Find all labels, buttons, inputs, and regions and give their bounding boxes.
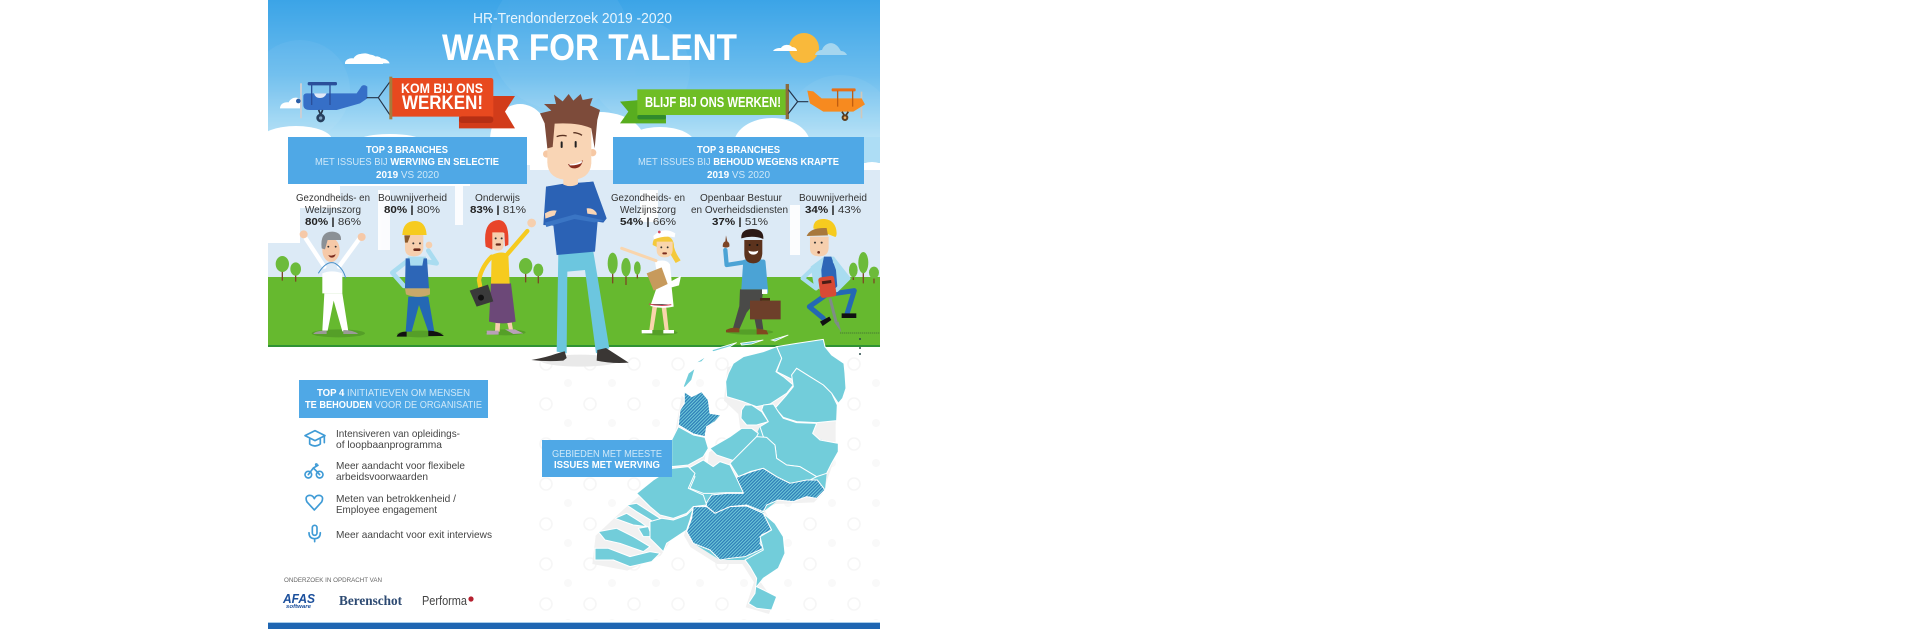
province: Friesland (726, 347, 793, 407)
text block: openbaar bestuur: en Overheidsdiensten (691, 204, 788, 216)
text block: bouwnijverheid right (799, 192, 867, 216)
province: Groningen (777, 339, 846, 403)
text block: gezondheids- en welzijnszorg right: 54% | 66% (620, 216, 676, 228)
panel: top 3 werving en selectie: 2019 VS 2020 (376, 169, 439, 181)
callout: gebieden met meeste issues met werving: ISSUES MET WERVING (554, 459, 660, 471)
icon: orange plane with green banner (620, 84, 865, 123)
banner text: kom bij ons werken (401, 81, 483, 114)
list item: exit interviews: Meer aandacht voor exit interviews (336, 529, 492, 541)
list item: opleidingen: of loopbaanprogramma (336, 439, 442, 451)
text block: onderzoek in opdracht van: ONDERZOEK IN OPDRACHT VAN (284, 577, 382, 584)
islands: Zeeland (595, 503, 660, 567)
province: Utrecht (688, 460, 743, 493)
figure: businessman (723, 229, 781, 335)
callout: gebieden met meeste issues met werving (542, 440, 672, 477)
map shadow (592, 343, 842, 614)
list item: flexibele arbeidsvoorwaarden (336, 460, 465, 483)
land underlay (637, 427, 838, 560)
icon: heart (306, 495, 323, 510)
icon: small cloud top left (345, 53, 383, 64)
province: Drenthe (775, 368, 837, 423)
province: Limburg (745, 513, 785, 610)
panel: top 4 initiatieven: TE BEHOUDEN VOOR DE ORGANISATIE (305, 399, 482, 411)
text block: onderwijs: Onderwijs (475, 192, 520, 204)
text block: onderwijs (470, 192, 526, 216)
figure: main character with crossed arms (531, 94, 629, 367)
figure: worker with jackhammer (803, 219, 880, 333)
panel: sky scene (250, 0, 895, 347)
logo: AFAS software: AFAS (282, 591, 315, 606)
heading: TOP 3 BRANCHES (366, 144, 448, 156)
province: Noord-Holland north hatched (678, 392, 721, 437)
text block: gezondheids- en welzijnszorg right: Gezondheids- en (611, 192, 685, 204)
province: Noord-Brabant hatched (687, 506, 772, 560)
text block: bouwnijverheid left: Bouwnijverheid (378, 192, 447, 204)
panel: top 3 behoud wegens krapte: 2019 VS 2020 (707, 169, 770, 181)
heading: TOP 3 BRANCHES (697, 144, 780, 156)
wadden islands (683, 335, 788, 387)
icon: blue plane with red banner (280, 54, 515, 128)
province: Flevoland (710, 428, 758, 462)
icon: graduation cap (305, 431, 325, 446)
panel: top 3 behoud wegens krapte (613, 137, 864, 184)
footer bar (268, 622, 880, 629)
text block: bouwnijverheid left (378, 192, 447, 216)
panel: top 3 werving en selectie (288, 137, 527, 184)
logo: Performa: Performa (422, 594, 467, 608)
province: Noord-Holland south (672, 427, 708, 467)
banner text: blijf bij ons werken: BLIJF BIJ ONS WERKEN! (645, 95, 781, 111)
logo: Berenschot: Berenschot (339, 593, 402, 608)
icon: trees left (276, 256, 543, 283)
icon: microphone (309, 525, 320, 542)
ground (268, 277, 880, 347)
text block: gezondheids- en welzijnszorg left (296, 192, 370, 228)
panel: top 3 werving en selectie: MET ISSUES BIJ WERVING EN SELECTIE (315, 156, 499, 168)
list item: opleidingen (336, 428, 460, 451)
banner text: kom bij ons werken: KOM BIJ ONS (401, 81, 483, 96)
dots (859, 338, 861, 355)
figure: construction worker (392, 221, 444, 337)
map: Netherlands (592, 335, 846, 614)
panel: top 3 behoud wegens krapte: MET ISSUES BIJ BEHOUD WEGENS KRAPTE (638, 156, 839, 168)
list item: betrokkenheid: Meten van betrokkenheid / (336, 493, 456, 505)
text block: gezondheids- en welzijnszorg left: Gezondheids- en (296, 192, 370, 204)
list item: flexibele arbeidsvoorwaarden: Meer aandacht voor flexibele (336, 460, 465, 472)
figure: doctor (300, 230, 366, 337)
province: Gelderland north (730, 437, 817, 483)
banner text: kom bij ons werken: WERKEN! (402, 93, 483, 114)
faint background clouds (491, 0, 670, 49)
text block: bouwnijverheid right: Bouwnijverheid (799, 192, 867, 204)
list item: betrokkenheid: Employee engagement (336, 504, 437, 516)
sky (268, 0, 880, 137)
callout: gebieden met meeste issues met werving: GEBIEDEN MET MEESTE (552, 448, 662, 460)
icon: trees right (608, 252, 879, 285)
icon: sun with clouds (773, 33, 847, 63)
province: Gelderland hatched (705, 468, 825, 513)
text block: openbaar bestuur: Openbaar Bestuur (700, 192, 782, 204)
title: WAR FOR TALENT (442, 27, 737, 68)
icon: decorative dot pattern behind the map (530, 350, 880, 620)
text block: onderwijs: 83% | 81% (470, 204, 526, 216)
list item: flexibele arbeidsvoorwaarden: arbeidsvoorwaarden (336, 471, 428, 483)
text block: bouwnijverheid left: 80% | 80% (384, 204, 440, 216)
city skyline (268, 165, 880, 277)
panel: infographic background (268, 0, 880, 629)
figure: teacher (470, 219, 536, 335)
text block: gezondheids- en welzijnszorg left: Welzijnszorg (305, 204, 361, 216)
text block: bouwnijverheid right: 34% | 43% (805, 204, 861, 216)
province: Noord-Brabant west (650, 508, 693, 552)
province: Noordoostpolder (741, 405, 768, 425)
list item: betrokkenheid (336, 493, 456, 516)
text block: openbaar bestuur: 37% | 51% (712, 216, 768, 228)
icon: bicycle (305, 464, 323, 478)
list item: opleidingen: Intensiveren van opleidings- (336, 428, 460, 440)
panel: top 4 initiatieven (299, 380, 488, 418)
white cloud band (268, 104, 878, 163)
logo: AFAS software: software (286, 604, 311, 610)
province: Overijssel (760, 404, 838, 477)
text block: openbaar bestuur (691, 192, 788, 228)
text block: gezondheids- en welzijnszorg right (611, 192, 685, 228)
subtitle: HR-Trendonderzoek 2019 -2020 (473, 11, 672, 27)
text block: gezondheids- en welzijnszorg left: 80% | 86% (305, 216, 361, 228)
figure: nurse (622, 230, 681, 335)
province: Zuid-Holland (637, 467, 707, 518)
text block: gezondheids- en welzijnszorg right: Welzijnszorg (620, 204, 676, 216)
heading: TOP 4 INITIATIEVEN OM MENSEN (317, 387, 470, 399)
